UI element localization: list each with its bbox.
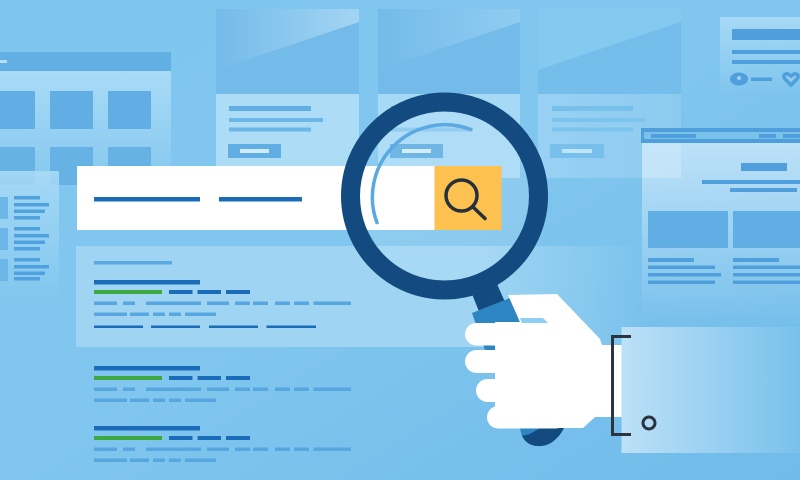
sleeve cuff: [622, 327, 800, 453]
result 2: [94, 366, 351, 402]
result 1: [94, 280, 351, 328]
panel: highlighted result: [76, 246, 646, 347]
panel: right browser window: [641, 128, 800, 323]
finger 3: [476, 379, 556, 402]
icon: search: [446, 180, 485, 218]
panel: top right social card: [720, 17, 800, 95]
ring: [350, 102, 538, 290]
result 3: [94, 426, 351, 462]
finger 2: [465, 350, 545, 373]
handle base: [520, 428, 564, 446]
search bar: [77, 166, 502, 230]
thumb gap: [520, 318, 548, 323]
finger 4: [487, 406, 567, 428]
panel: article card 1: [216, 9, 359, 178]
magnifying glass: [350, 102, 564, 446]
panel: left grid window: [0, 52, 171, 186]
icon: heart: [784, 74, 798, 85]
handle neck: [472, 284, 505, 314]
hand: [465, 294, 622, 428]
cuff button: [643, 417, 655, 429]
cuff bracket: [612, 336, 631, 434]
lens highlight arc: [372, 125, 472, 224]
lens tint: [360, 112, 528, 280]
panel: article card 3: [538, 9, 681, 178]
handle grip: [472, 298, 522, 350]
icon: eye: [730, 72, 748, 86]
panel: article card 2: [378, 9, 520, 178]
search button: [434, 166, 502, 230]
panel: left small list window: [0, 171, 59, 306]
finger 1: [465, 323, 545, 346]
